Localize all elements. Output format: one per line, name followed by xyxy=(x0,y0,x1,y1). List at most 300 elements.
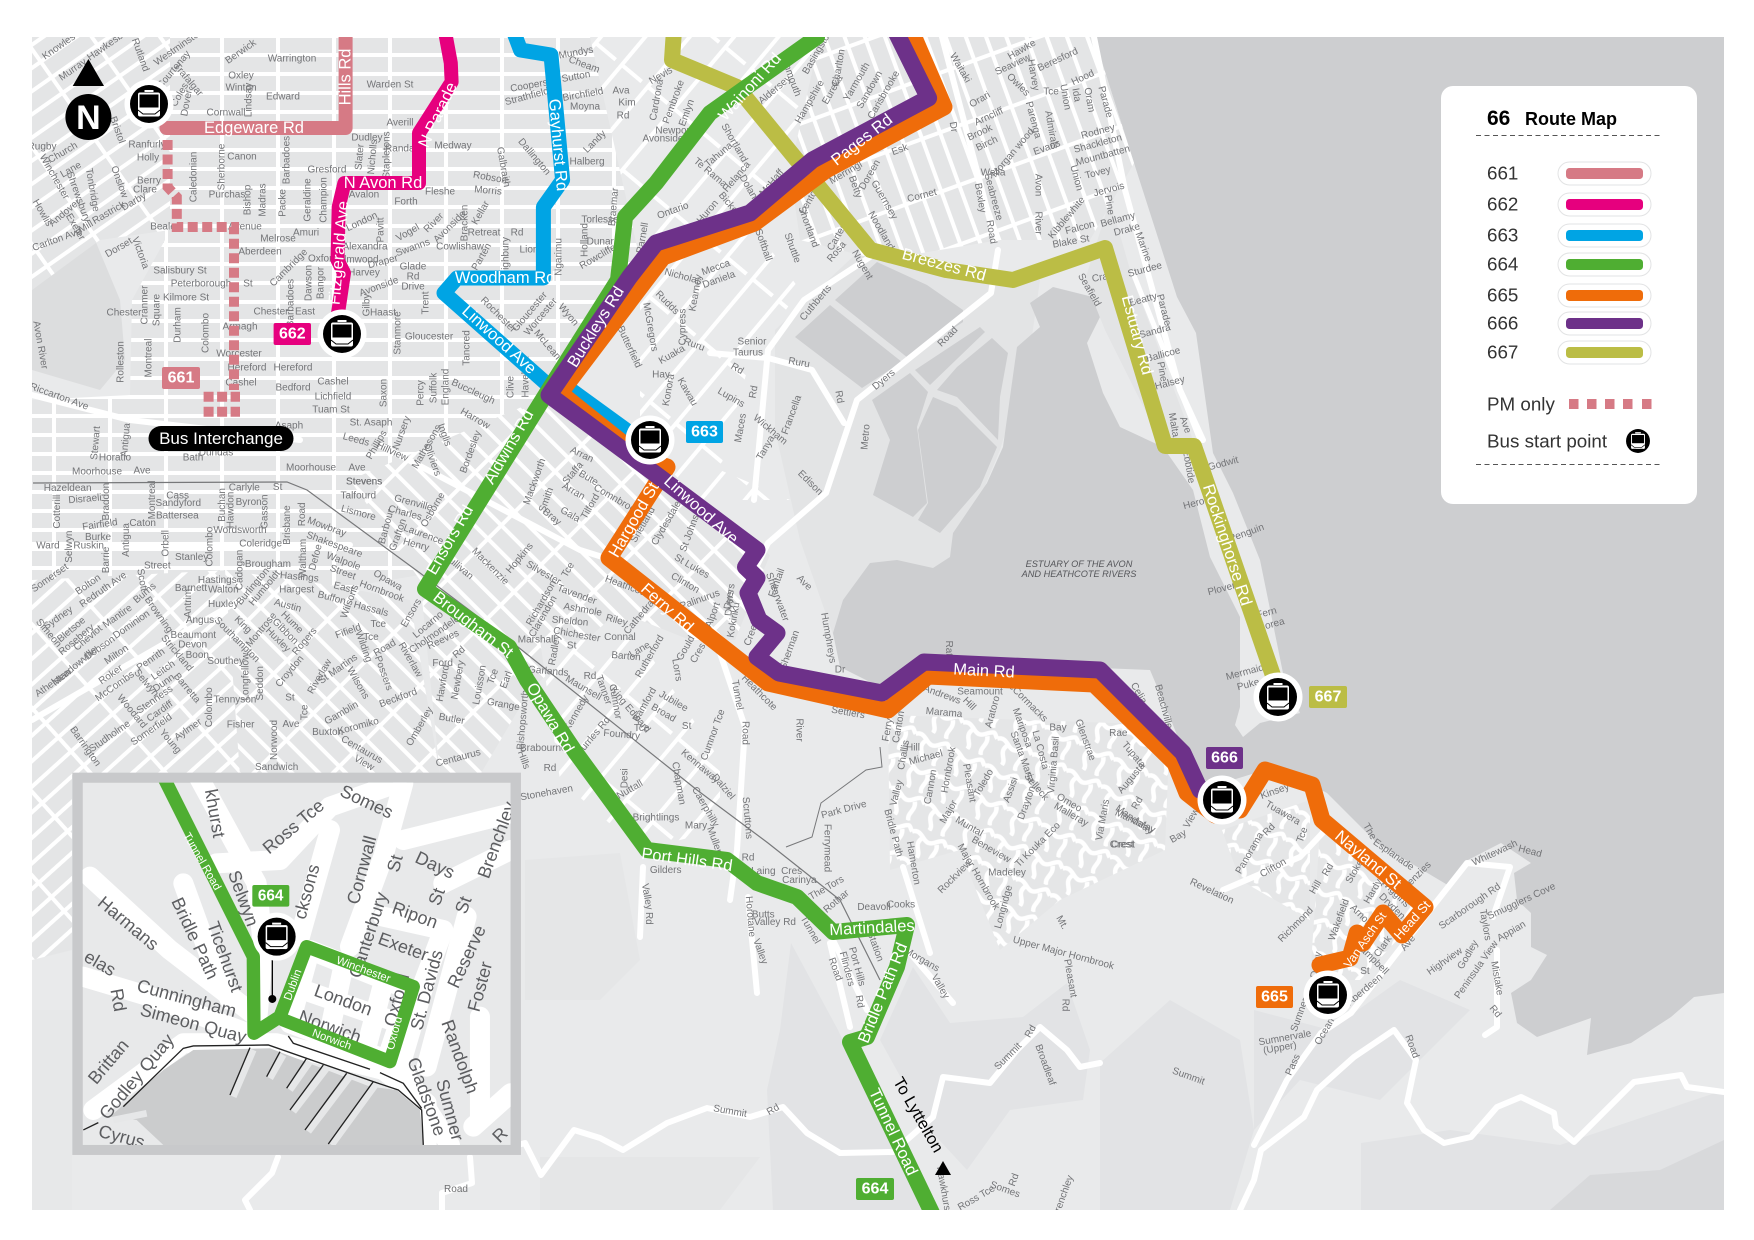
white route names xyxy=(204,49,1434,1178)
street names: north west: Holland xyxy=(580,223,590,257)
street names: Sumner and Redcliffs: (Upper) xyxy=(1262,1040,1298,1057)
street names: north west: Carlton Ave xyxy=(31,226,83,254)
street names: south central: Challis xyxy=(896,739,912,771)
street names: north east: Nugent xyxy=(849,248,875,282)
street names: south west: Buxton xyxy=(312,727,343,738)
street names: north west: Square xyxy=(152,293,162,326)
street names: Sumner and Redcliffs: Augusta xyxy=(1116,760,1148,796)
street names: north west: Packe xyxy=(278,189,288,217)
street names: south west: Scott xyxy=(134,568,149,592)
inset bus icon xyxy=(253,913,301,961)
street names: Port Hills: Mt. xyxy=(1053,914,1070,931)
street names: south west: Wordsworth xyxy=(213,525,267,536)
street names: south central: Tunnel xyxy=(729,679,745,711)
street names: Port Hills xyxy=(639,865,1115,1219)
street names: central: Garlands xyxy=(528,664,569,679)
street names: north west: Braemar xyxy=(607,187,621,227)
street names: north west: Ngarimu xyxy=(554,238,564,276)
street names: south west: Milton xyxy=(103,643,131,667)
white route names: Tunnel Road xyxy=(865,1086,921,1178)
street names: north east: Tanya xyxy=(755,433,778,462)
street names: central: St xyxy=(567,640,577,651)
street names: spit: Penguin xyxy=(1228,522,1266,545)
street names: south west: Ford xyxy=(432,658,453,669)
street names: north west: Inglis xyxy=(435,422,453,448)
street names: south west: Brougham xyxy=(245,559,291,570)
hills shading xyxy=(1550,1140,1724,1210)
street names: south west: Angus xyxy=(186,615,214,626)
white route names: Rockinghorse Rd xyxy=(1199,482,1255,608)
street names: south west: Ward xyxy=(36,540,60,551)
inset street names: Selwyn xyxy=(224,868,263,929)
street names: south west: Stenness xyxy=(135,684,175,716)
street names: Port Hills: Port Hills xyxy=(846,946,867,987)
street names: south west: Street xyxy=(328,563,357,582)
street names: central: Bishopsworth xyxy=(515,690,531,750)
street names: south central: Aratoro xyxy=(983,694,1003,729)
street names: central: Barton xyxy=(611,650,641,663)
street names: Sumner and Redcliffs: Dryden xyxy=(1376,891,1407,922)
street names: Port Hills: Deavoll xyxy=(857,902,891,913)
badge 664: 664 xyxy=(862,1180,888,1198)
street names: north west: Fleshe xyxy=(425,186,455,198)
street names: north west: Dallington xyxy=(515,136,553,178)
street names: south central: Mandalay xyxy=(1113,803,1155,837)
white route names: Linwood Ave xyxy=(458,302,540,378)
route 665 xyxy=(560,30,1425,965)
street names: north west: Champion xyxy=(318,177,330,223)
street names: south west: Somerset xyxy=(29,561,71,595)
street names: north east: Lupins xyxy=(715,386,747,410)
street names: north west: Trent xyxy=(420,291,432,314)
street names: south west: Leitch xyxy=(149,658,177,683)
legend: bus start point xyxy=(1487,429,1650,453)
street names: south west: Fisher xyxy=(227,719,255,730)
street names: north east: Mecca xyxy=(700,258,732,278)
street names: north east: Rd xyxy=(832,390,846,404)
route 662 xyxy=(337,30,452,320)
street names: north west: Moorhouse xyxy=(286,462,336,474)
street names: south west: Ave xyxy=(282,719,300,730)
street names: north west: Rugby xyxy=(28,142,56,152)
street names: spit: Sandra xyxy=(1138,322,1172,341)
street names: north west: Antigua xyxy=(119,422,133,457)
street names: south west: Mackenzie xyxy=(469,546,511,588)
street names: south west: Ensors xyxy=(399,597,424,630)
inset bus stop pointer xyxy=(270,955,274,998)
inset street names: Randolph xyxy=(437,1017,483,1096)
street names: south west: Cotterill xyxy=(52,495,63,529)
street names: north west: Riccarton Ave xyxy=(28,381,90,413)
street names: south west: Walton xyxy=(208,584,239,595)
street names: south west: Redruth Ave xyxy=(78,570,129,610)
street names: north west: Winchester xyxy=(37,153,72,202)
urban street blocks xyxy=(32,37,1425,980)
street names: north west: Parten xyxy=(470,241,494,273)
street names: central: Cumnor xyxy=(606,683,624,721)
street names: north east: Wella xyxy=(981,168,1006,178)
street names: north east: Sandown xyxy=(855,69,885,111)
street names: north east: Rd xyxy=(729,361,745,377)
street names: south central: Valley xyxy=(888,779,906,807)
street names: Sumner and Redcliffs: Whitewash xyxy=(1471,838,1519,869)
street names: north west: Mathesons xyxy=(410,423,444,471)
street names: north east: Sturdee xyxy=(1127,260,1164,280)
legend: route rows: 662 xyxy=(1487,194,1518,214)
street names: south west: Rd xyxy=(451,644,468,661)
street names: north west: Rastrick xyxy=(91,199,128,227)
icon: bus start 666 xyxy=(1198,776,1246,824)
street names: north west: Bracken xyxy=(460,205,470,241)
inset street names: St xyxy=(424,885,449,908)
street names: south west: Huxley xyxy=(208,599,239,610)
street names: south west: Rogers xyxy=(290,626,320,658)
street names: north west: Barbadoes xyxy=(286,279,296,327)
street names: north east: Noodlands xyxy=(865,210,899,256)
street names: north west: Strathfield xyxy=(504,86,550,108)
street names: south west: Newbery xyxy=(449,660,467,700)
street names: Port Hills: Rd xyxy=(1007,1172,1022,1188)
street names: south west: Sandwich xyxy=(255,762,298,773)
street names: south west: Burlington xyxy=(235,566,272,607)
street names: central: Smith xyxy=(537,486,556,514)
street names: north west: Haast xyxy=(370,308,396,318)
street names: south central: Mariposa xyxy=(1010,707,1034,750)
street names: south west: Waltham xyxy=(298,539,309,578)
inset street names: Harmans xyxy=(94,892,163,954)
street names: north east: Te Rama xyxy=(691,156,729,190)
street names: north east: Maces xyxy=(733,413,749,443)
street names: north east: Metro xyxy=(859,423,873,450)
street names: south west: Buchan xyxy=(217,488,228,522)
street names: central: Chichester xyxy=(552,625,602,645)
street names: south west: McCombs xyxy=(93,669,137,704)
street names: south west: Beaumont xyxy=(171,630,216,641)
street names: north east: Orari xyxy=(968,90,992,110)
label: estuary: AND HEATHCOTE RIVERS xyxy=(1021,569,1137,579)
street names: north west: Knowles xyxy=(40,32,78,62)
street names: spit: Mermaid xyxy=(1225,662,1265,683)
street names: north east: Francella xyxy=(780,393,804,436)
street names: north west: Canon xyxy=(227,152,257,162)
white route names: Brougham St xyxy=(430,588,517,662)
street names: south central: Kokiriku xyxy=(725,602,743,638)
inset street names: Days xyxy=(412,847,458,883)
street names: central: Lane xyxy=(628,639,653,660)
inset street names: St. Davids xyxy=(406,948,447,1032)
street names: south west: St xyxy=(273,482,283,493)
street names: south west: Dominion xyxy=(111,608,152,642)
badge 665 xyxy=(1256,986,1293,1008)
street names: north east: Kawau xyxy=(675,376,699,408)
inset street names: Sumner xyxy=(432,1077,468,1143)
legend: route rows: 667 xyxy=(1487,342,1518,362)
street names: north west: Murray xyxy=(57,57,89,83)
street names: south central: Hamerton xyxy=(904,840,922,886)
street names: Port Hills: Valley Rd xyxy=(754,917,796,928)
inset harbour xyxy=(110,1048,423,1145)
street names: Sumner and Redcliffs: Panorama xyxy=(1234,830,1266,876)
land around the ponds xyxy=(775,250,1040,640)
street names: north east: Shortland xyxy=(796,205,820,249)
street names: Sumner and Redcliffs: Hardy xyxy=(1362,877,1385,906)
street names: central: Tilford xyxy=(579,492,602,521)
street names: Sumner and Redcliffs: Derby xyxy=(1309,951,1324,979)
street names: north west: Montreal xyxy=(144,339,154,377)
street names: north east: Basingstoke xyxy=(801,23,838,76)
street names: central: Arran xyxy=(568,445,595,465)
street names: south west: Sullivan xyxy=(441,551,475,582)
street names: central: Shetland xyxy=(629,505,658,545)
street names: north west: Leeds xyxy=(341,431,371,449)
street names: south west: Gibbon xyxy=(270,616,300,647)
street names: Port Hills: Broadleaf xyxy=(1032,1043,1058,1087)
street names: central: Rd xyxy=(544,763,556,774)
badge 667: 667 xyxy=(1315,688,1341,706)
street names: south west: Rosebery xyxy=(57,622,97,658)
street names: central: Bamford xyxy=(631,686,659,724)
badge 662: 662 xyxy=(279,326,306,342)
legend: PM only xyxy=(1487,394,1652,414)
white route names: Hills Rd xyxy=(337,49,355,105)
street names: north west: Bath xyxy=(183,452,203,464)
white route names: Buckleys Rd xyxy=(564,283,628,371)
street names: south west: Road xyxy=(372,638,398,659)
white route names: Breezes Rd xyxy=(900,245,988,285)
inset: Lyttelton xyxy=(72,773,521,1155)
street names: north east xyxy=(614,23,1164,498)
street names: north west: Ava xyxy=(612,86,630,96)
street names: Port Hills: Morgans xyxy=(902,946,941,974)
street names: south west: St xyxy=(285,692,295,703)
street names: central: Hopkins xyxy=(504,541,536,576)
route 661 PM only dashed xyxy=(168,140,240,412)
street names: south central: Santa Maria xyxy=(1008,730,1037,785)
icon: bus start 661 xyxy=(124,80,174,128)
street names: north west: Colombo xyxy=(200,313,212,353)
street names: south central: Cannon xyxy=(923,769,939,805)
street names: south central: Glenstrae xyxy=(1072,718,1098,763)
street names: south west: Cadogan xyxy=(234,550,245,590)
street names: Port Hills: Rd xyxy=(765,1102,782,1118)
street names: central: Kennedy xyxy=(562,693,591,733)
street names: Sumner and Redcliffs: Menzies xyxy=(1400,860,1434,894)
street names: north east: McGregors xyxy=(640,302,660,352)
street names: north west: Rowcliffe xyxy=(578,242,619,272)
street names: south west: Locarno xyxy=(411,609,446,641)
street names: central: Rutherford xyxy=(633,633,667,680)
street names: north west xyxy=(28,23,636,488)
street names: central: Gould xyxy=(675,634,697,663)
street names: north east: Emlyn xyxy=(677,98,697,128)
street names: north east: Shackleton xyxy=(1073,132,1123,156)
street names: Port Hills: Rd xyxy=(853,994,866,1009)
white route names: Woodham Rd xyxy=(455,269,555,287)
street names: south central: Toledo xyxy=(972,767,996,799)
street names: north west: Avonside xyxy=(358,275,401,299)
white route names: Van Asch St xyxy=(1341,909,1390,970)
street names: north east: Hood xyxy=(1070,68,1096,88)
street names: south central: Dalziel xyxy=(709,772,737,802)
street names: south central: Shearwater xyxy=(763,571,791,624)
badge 665: 665 xyxy=(1261,988,1288,1006)
street names: south west: Disraeli xyxy=(68,492,102,506)
legend: route rows xyxy=(1487,162,1651,364)
To Lyttelton arrow: To Lyttelton xyxy=(889,1074,947,1156)
street names: south west: Barretta xyxy=(171,671,203,706)
street names: north west: Ave xyxy=(133,466,151,476)
street names: north west: Birchfield xyxy=(562,86,604,104)
street names: north west: Pavitt xyxy=(376,217,386,243)
street name: road bottom: Road xyxy=(444,1184,468,1195)
street names: Sumner and Redcliffs: Ave xyxy=(1399,933,1418,953)
street names: Port Hills: Tunnel xyxy=(798,914,822,946)
street names: Sumner and Redcliffs: Esplanade xyxy=(1371,837,1416,873)
legend: bus start point: Bus start point xyxy=(1487,430,1608,452)
street names: south west: Selwyn xyxy=(131,667,161,699)
street names: north west: Morris xyxy=(474,184,502,198)
street names: south west: Southey xyxy=(207,656,244,667)
street names: Sumner and Redcliffs: Summit xyxy=(1171,1066,1206,1088)
street names: central: Bray xyxy=(540,507,563,528)
street names: central: Gala xyxy=(558,505,582,525)
street names: central: Tce xyxy=(560,560,577,579)
inset route names: Dublin xyxy=(282,968,304,1002)
street names: south west: Fifield xyxy=(334,622,363,641)
street names: north east: Dolan xyxy=(737,173,759,201)
street names: north east: Ruru xyxy=(682,336,706,354)
street names: north west: Howlis xyxy=(30,197,54,229)
street names: south central: Bay xyxy=(1049,722,1067,734)
street names: Port Hills: Road xyxy=(826,956,844,982)
street names: north west: Gilby xyxy=(362,294,372,316)
street names: north west: Avon River xyxy=(30,320,50,371)
street names: south west: Hawford xyxy=(435,664,452,703)
street names: north west: Holly xyxy=(137,152,159,164)
street names: north east: Seafield xyxy=(1075,272,1103,308)
street names: north west: Cashel xyxy=(317,376,349,388)
street names: north east: Eureka xyxy=(820,73,846,106)
street names: north west: Bedford xyxy=(275,382,311,394)
street names: north east: Hawke xyxy=(1006,37,1038,62)
street names: north west: Gloucester xyxy=(405,332,454,342)
street names: north west: Asaph xyxy=(275,420,303,432)
street names: south west: Riverlaw xyxy=(396,641,425,680)
street names: north west: Robson xyxy=(472,170,508,186)
street names: south central: Dr xyxy=(835,664,846,676)
street names: Port Hills: Cooks xyxy=(887,899,915,910)
street names: south central: Muller xyxy=(704,825,724,855)
street names: south central: Scruttons xyxy=(740,796,754,840)
street names: north west: England xyxy=(440,369,452,405)
street names: north west: Purchas xyxy=(209,190,245,200)
street names: south west: Lismore xyxy=(340,503,377,523)
street names: south west: Southampton xyxy=(212,615,262,665)
street names: central: Maunsell xyxy=(563,674,603,703)
street names: spit: Ave xyxy=(1177,415,1193,435)
street names: south west: Hornbrook xyxy=(358,579,405,605)
inset piers xyxy=(113,1050,377,1145)
street names: central: Hills xyxy=(515,749,532,771)
street names: north west: Rd xyxy=(407,272,419,282)
street names: Sumner and Redcliffs: Beachville xyxy=(1152,683,1175,730)
street names: south west: Antigua xyxy=(121,523,132,557)
street names: north east: Konora xyxy=(661,373,677,407)
street names: Port Hills: Cres xyxy=(781,866,802,877)
inset route names: Oxford xyxy=(385,1015,405,1051)
street names: north west: Oxford xyxy=(308,254,338,264)
street names: north west: Slater xyxy=(353,143,367,170)
street names: south west: Coleridge xyxy=(239,538,282,549)
street names: central: Broad xyxy=(649,702,678,725)
street names: south west: Athelstan xyxy=(33,667,74,700)
street names: south west: Wilding xyxy=(353,629,374,664)
street names: Sumner and Redcliffs: Wakefield xyxy=(1327,898,1352,942)
street names: Port Hills: Upper Major Hornbrook xyxy=(1011,935,1115,972)
oxidation ponds xyxy=(795,262,1008,533)
street names: north west: Tuam St xyxy=(312,404,350,416)
street names: north west: Melrose xyxy=(260,234,296,244)
street names: north east: Cornet xyxy=(906,187,938,205)
icon: bus start 665 xyxy=(1304,970,1352,1020)
street names: north east: Road xyxy=(984,219,998,245)
street names: north west: River xyxy=(422,210,447,235)
street names: south west xyxy=(29,476,521,774)
street names: south west: Simeon xyxy=(33,617,63,650)
legend: route rows: 664 xyxy=(1487,254,1518,274)
white route names: Bridle Path Rd xyxy=(855,940,911,1046)
street names: south central: Andrews xyxy=(922,683,962,707)
street names: Sumner and Redcliffs: Ocean xyxy=(1313,1016,1337,1047)
street names: Port Hills: Carinya xyxy=(782,875,817,886)
street names: Sumner and Redcliffs: Scarborough Rd xyxy=(1437,881,1503,932)
street names: north west: Torlesse xyxy=(581,214,619,226)
icon: bus start 662 xyxy=(318,310,366,358)
street names: north west: St xyxy=(243,278,253,290)
street names: south west: Hawdon xyxy=(225,492,236,528)
badge 666 xyxy=(1206,747,1243,769)
inset route names: Norwich xyxy=(310,1027,353,1053)
street names: south central: Road xyxy=(740,721,750,745)
street names: north west: Stanmore xyxy=(392,311,404,355)
street names: north west: Salisbury St xyxy=(153,266,207,276)
street names: south west: Braddon xyxy=(101,483,112,521)
street names: south central: Omeo xyxy=(1054,791,1084,815)
street names: south west: Omberley xyxy=(404,705,436,748)
street names: north west: Highbury xyxy=(500,237,512,277)
street names: south west: Buffon xyxy=(316,589,347,607)
street names: north east: Dyers xyxy=(870,367,898,393)
street names: south central: Park Drive xyxy=(820,799,868,821)
street names: spit: Heron xyxy=(1182,494,1211,512)
street names: south central: Ti Kouka Eco xyxy=(1013,820,1063,870)
street names: north west: Stevens xyxy=(346,476,382,488)
street names: Sumner and Redcliffs: The xyxy=(1360,821,1379,842)
street names: north east: Nicholas xyxy=(663,267,703,287)
street names: Sumner and Redcliffs: Richmond xyxy=(1276,905,1316,945)
street names: north west: Cowlishaw xyxy=(436,242,485,252)
street names: north east: Mountbatten xyxy=(1075,143,1131,169)
street names: north east: Shuttle xyxy=(782,231,803,265)
Hagley Park xyxy=(32,240,125,390)
street names: north east: Cra xyxy=(1091,271,1109,285)
street names: central: Tanner xyxy=(593,674,614,707)
street names: south west: Norwood xyxy=(269,720,280,760)
inset route names: Tunnel Road xyxy=(180,831,223,893)
street names: north west: Berwick xyxy=(224,37,259,67)
street names: north west: Rd xyxy=(617,110,629,122)
inset street names: Norwich xyxy=(296,1006,364,1047)
